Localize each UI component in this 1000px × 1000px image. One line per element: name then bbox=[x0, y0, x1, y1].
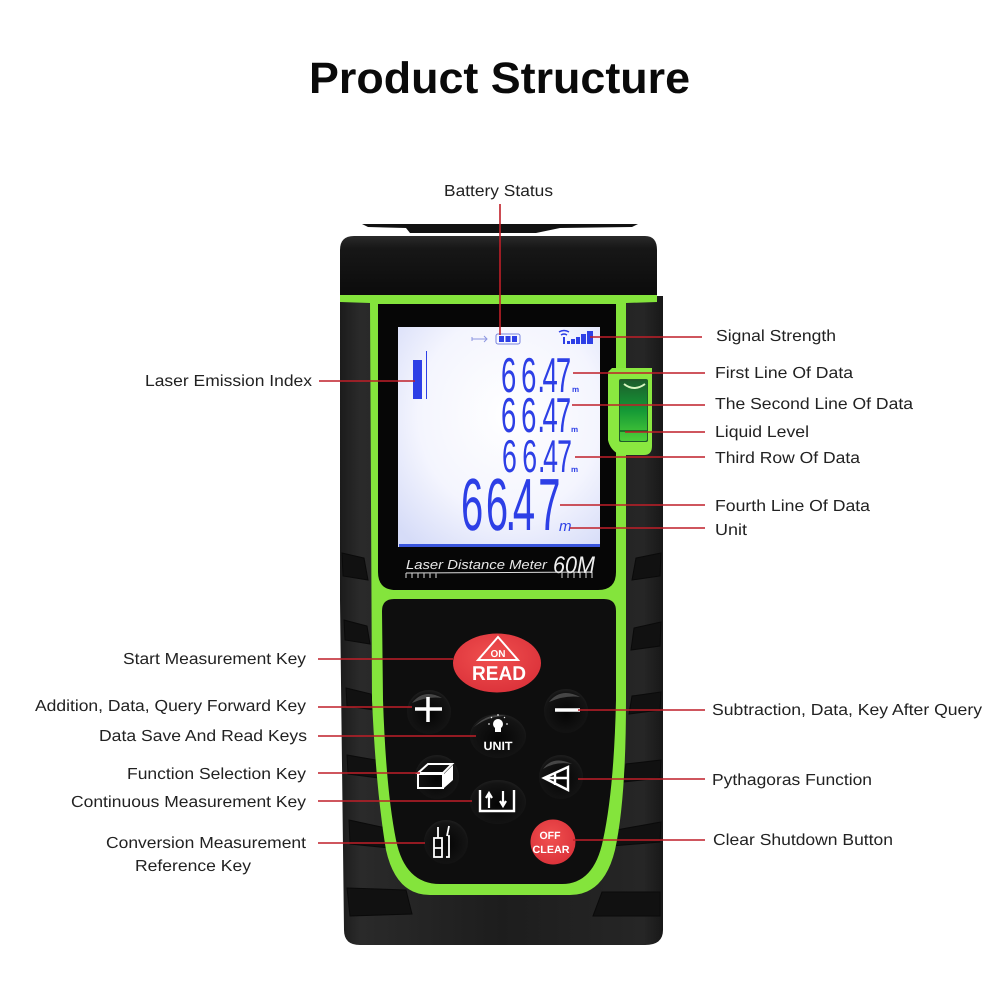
callout: fourth line of data: Fourth Line Of Data bbox=[715, 498, 870, 515]
device: laser distance meter bbox=[340, 224, 663, 945]
callout: liquid level: Liquid Level bbox=[715, 424, 809, 441]
callout: continuous measurement key: Continuous Measurement Key bbox=[71, 794, 306, 811]
side grip ridges bbox=[342, 553, 661, 916]
keypad panel bbox=[382, 599, 616, 884]
green frame bbox=[340, 295, 657, 895]
third data unit: m bbox=[571, 465, 578, 474]
callout: unit: Unit bbox=[715, 522, 748, 539]
callout: battery status: Battery Status bbox=[444, 183, 553, 200]
first data line: 66.47 bbox=[501, 349, 571, 403]
model caption bbox=[406, 552, 595, 579]
third data line: 66.47 bbox=[502, 430, 572, 482]
continuous measurement button bbox=[470, 780, 526, 824]
range arrow icon bbox=[472, 336, 487, 342]
callout: function selection key: Function Selection Key bbox=[127, 766, 306, 783]
callout: signal strength: Signal Strength bbox=[716, 328, 836, 345]
display bezel bbox=[378, 304, 616, 590]
callout: subtraction key: Subtraction, Data, Key After Query bbox=[712, 702, 982, 719]
on read button: READ bbox=[472, 663, 526, 685]
model caption: 60M bbox=[553, 552, 595, 579]
fourth data line: 66.47 bbox=[461, 463, 560, 546]
callout: third row of data: Third Row Of Data bbox=[715, 450, 860, 467]
callout: laser emission index: Laser Emission Index bbox=[145, 373, 312, 390]
minus button bbox=[544, 689, 588, 733]
callout: conversion measurement reference key: Conversion Measurement bbox=[106, 835, 307, 852]
top black cap bbox=[340, 236, 657, 297]
pythagoras button bbox=[539, 755, 583, 799]
off clear button: OFF bbox=[540, 830, 561, 842]
callout: conversion measurement reference key: Reference Key bbox=[135, 858, 251, 875]
unit button bbox=[470, 714, 526, 758]
on read button: ON bbox=[490, 649, 506, 660]
callout: pythagoras function: Pythagoras Function bbox=[712, 772, 872, 789]
signal icon bbox=[559, 330, 593, 344]
spirit level bbox=[608, 368, 652, 455]
lower rubber body bbox=[340, 296, 663, 945]
plus button bbox=[407, 690, 451, 734]
callout: start measurement key: Start Measurement Key bbox=[123, 651, 306, 668]
title: Product Structure bbox=[309, 54, 690, 103]
callout: first line of data: First Line Of Data bbox=[715, 365, 853, 382]
unit button: UNIT bbox=[484, 739, 513, 753]
callout: clear shutdown button: Clear Shutdown Button bbox=[713, 832, 893, 849]
model caption: Laser Distance Meter bbox=[406, 557, 548, 572]
callout: second line of data: The Second Line Of Data bbox=[715, 396, 913, 413]
first data unit: m bbox=[572, 385, 579, 394]
callout: data save and read keys: Data Save And Read Keys bbox=[99, 728, 307, 745]
top edge strip bbox=[362, 224, 638, 233]
battery icon bbox=[496, 334, 520, 344]
second data unit: m bbox=[571, 425, 578, 434]
second data line: 66.47 bbox=[501, 389, 571, 443]
laser emission bars bbox=[413, 351, 427, 399]
function selection button bbox=[415, 755, 459, 799]
on read button bbox=[453, 634, 541, 692]
fourth data unit: m bbox=[559, 518, 572, 535]
off clear button: CLEAR bbox=[532, 844, 570, 856]
lcd screen bbox=[398, 327, 600, 547]
conversion reference button bbox=[424, 820, 468, 864]
off clear button bbox=[530, 820, 576, 864]
callout: addition key: Addition, Data, Query Forward Key bbox=[35, 698, 306, 715]
callout: conversion measurement reference key bbox=[106, 835, 425, 875]
